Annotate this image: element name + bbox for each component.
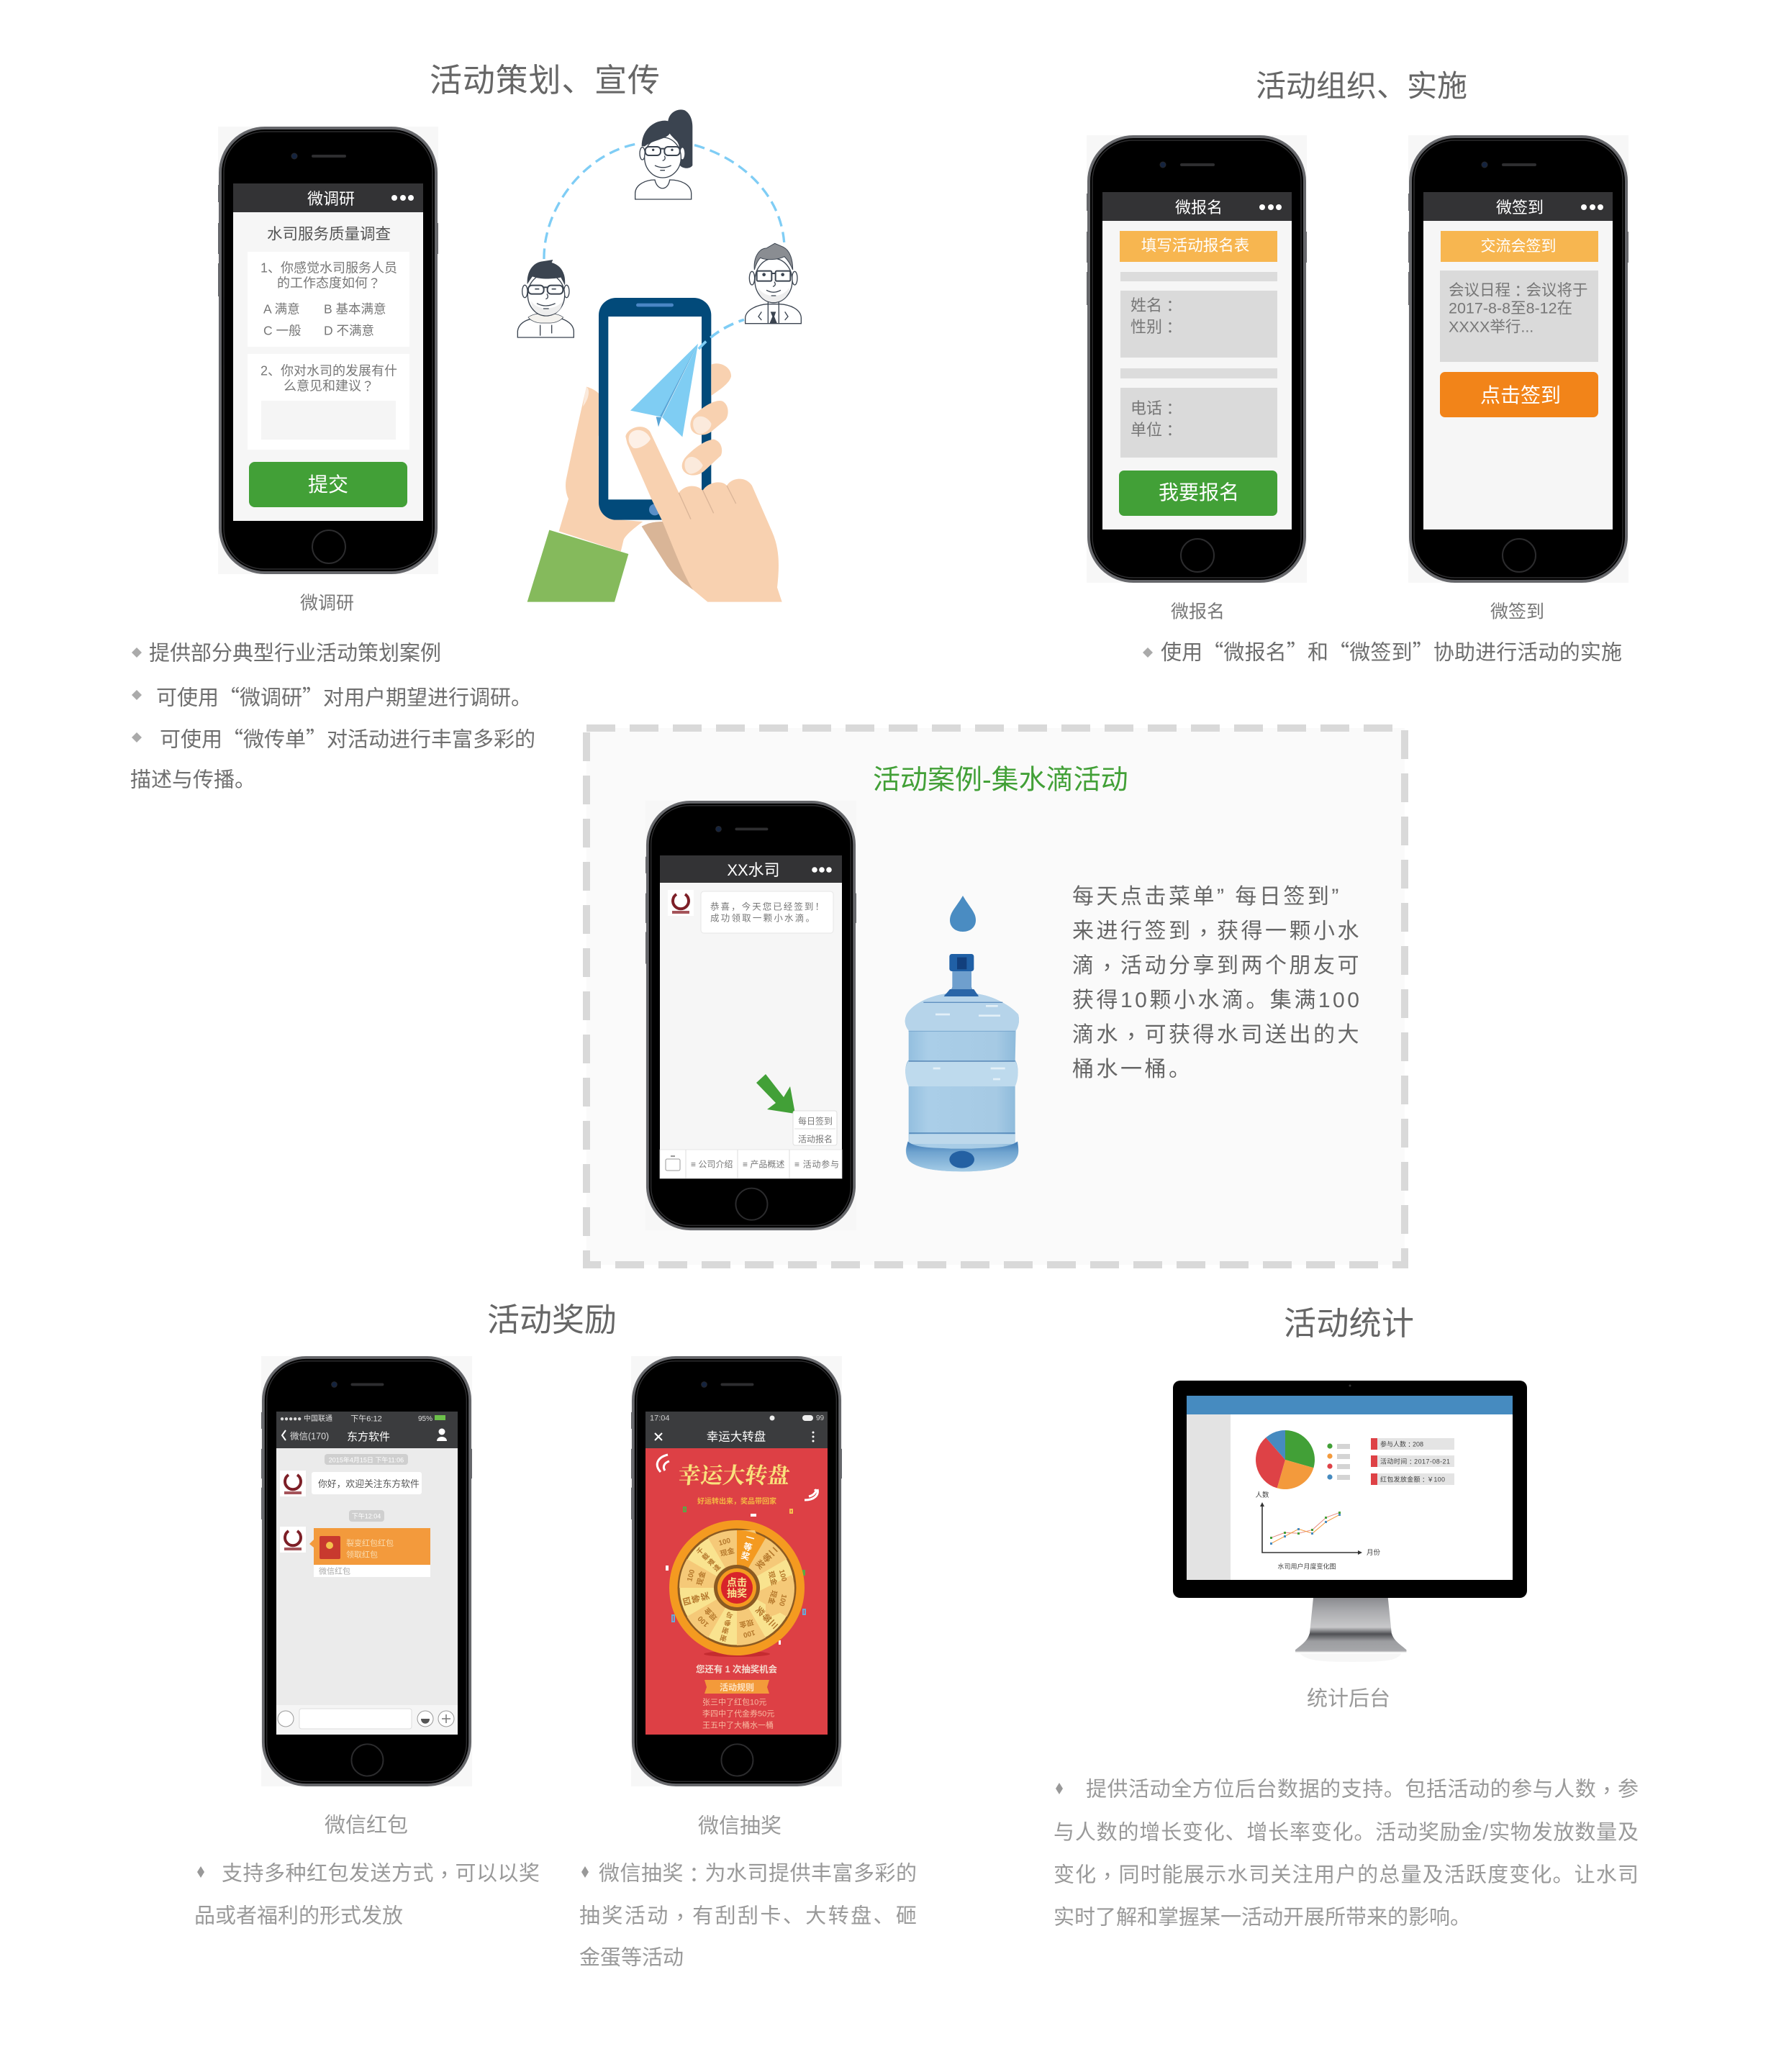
caption: 微信抽奖: 微信抽奖 [698, 1814, 781, 1837]
lottery header: 幸运大转盘 [707, 1430, 766, 1443]
register button [1119, 471, 1277, 516]
prize wheel: 奖 [753, 1558, 767, 1571]
list: statistics [1054, 1774, 1639, 1930]
meeting info box: XXXX举行... [1449, 318, 1533, 335]
prize wheel: 难 [706, 1557, 717, 1568]
list: statistics: 变化，同时能展示水司关注用户的总量及活跃度变化。让水司 [1054, 1860, 1639, 1891]
paper plane [630, 344, 698, 437]
check-in button: 点击签到 [1480, 384, 1561, 406]
stat rows [1371, 1438, 1454, 1485]
stat rows: 参与人数：208 [1380, 1440, 1423, 1449]
meeting info box: 会议日程：会议将于 [1449, 279, 1588, 301]
question card 1: A 满意 [263, 302, 300, 317]
prize wheel: 100 [718, 1537, 732, 1548]
prize wheel: 等 [760, 1611, 774, 1625]
prize wheel: 三 [766, 1617, 780, 1631]
prize wheel: 100 [686, 1568, 697, 1583]
phone header bar: 微报名 [1175, 199, 1223, 217]
form fields: phone and unit: 单位： [1131, 419, 1178, 442]
case heading: 活动案例-集水滴活动 [873, 765, 1128, 796]
welcome bubble [312, 1472, 422, 1494]
lottery header [645, 1412, 828, 1448]
list: statistics: 提供活动全方位后台数据的支持。包括活动的参与人数，参 [1086, 1774, 1639, 1804]
prize wheel: 奖 [753, 1604, 767, 1618]
form fields: phone and unit: 电话： [1131, 397, 1178, 420]
pop-up menu [793, 1111, 837, 1145]
list: statistics: 实时了解和掌握某一活动开展所带来的影响。 [1054, 1905, 1471, 1930]
prize wheel: 现金 [766, 1589, 779, 1606]
monitor stand [1295, 1596, 1406, 1662]
caption: 微签到: 微签到 [1490, 601, 1544, 622]
rules ribbon [704, 1680, 769, 1694]
phone header bar [1423, 192, 1613, 221]
prize wheel: 四 [681, 1596, 693, 1607]
survey title: 水司服务质量调查 [267, 226, 391, 243]
case description: 滴水，可获得水司送出的大 [1072, 1019, 1362, 1050]
list: planning points: 提供部分典型行业活动策划案例 [149, 642, 441, 665]
decorative swirls and confetti [657, 1455, 817, 1644]
icon: water bottle [905, 954, 1019, 1171]
prize wheel: 奖 [699, 1591, 711, 1602]
list: lottery [579, 1859, 917, 1970]
time pill [349, 1510, 384, 1522]
list: planning points: 可使用“微调研”对用户期望进行调研。 [156, 681, 532, 711]
prize wheel: 点击 [727, 1577, 747, 1589]
monitor screen [1187, 1396, 1513, 1580]
phone header bar [660, 855, 842, 883]
pie chart [1256, 1430, 1315, 1489]
dashed trail [699, 319, 744, 349]
case description: 来进行签到，获得一颗小水 [1072, 915, 1362, 947]
chat header [276, 1412, 458, 1448]
question card 1 [248, 252, 409, 347]
question card 1: 的工作态度如何？ [277, 273, 381, 292]
icon: water drop [950, 896, 976, 932]
prize wheel: 载 [700, 1551, 712, 1562]
phone: 微信红包 chat [261, 1356, 472, 1786]
prize wheel: 参 [722, 1617, 732, 1627]
prize wheel: 一 [745, 1532, 756, 1544]
line chart: 水司用户月度变化图 [1277, 1563, 1336, 1570]
green arrow [756, 1074, 795, 1114]
bottom menu: ≡ 产品概述 [743, 1160, 784, 1170]
question card 1: B 基本满意 [324, 302, 386, 317]
phone header bar: XX水司 [727, 861, 780, 879]
phone header bar [1102, 192, 1292, 221]
prize wheel: 奖 [740, 1550, 751, 1562]
caption: 微调研: 微调研 [300, 593, 354, 613]
avatar: man with hoodie [517, 260, 574, 337]
submit button: 提交 [308, 473, 348, 496]
phone header bar [233, 183, 423, 212]
rules ribbon: 活动规则 [720, 1682, 754, 1692]
winners list [702, 1698, 774, 1730]
phone: XX水司 chat [645, 801, 856, 1230]
phone: 微调研 survey [218, 127, 438, 574]
lottery title: 幸运大转盘 [676, 1458, 792, 1489]
illustration: hands holding phone [527, 298, 782, 602]
lottery subtitle: 好运转出来，奖品带回家 [697, 1496, 776, 1506]
question card 1: C 一般 [263, 324, 301, 338]
prize wheel: 100 [742, 1628, 756, 1639]
heading: 活动策划、宣传: 活动策划、宣传 [430, 62, 660, 99]
heading: 活动组织、实施: 活动组织、实施 [1256, 69, 1467, 103]
company logo [668, 890, 694, 916]
phone: 幸运大转盘 lottery [631, 1356, 842, 1786]
prize wheel: 逢 [712, 1562, 722, 1573]
list: planning points: 描述与传播。 [130, 768, 255, 791]
chat header: 东方软件 [347, 1431, 390, 1443]
line chart: 月份 [1367, 1548, 1380, 1557]
register button: 我要报名 [1159, 481, 1239, 504]
prize wheel: 等 [689, 1594, 702, 1604]
phone header bar: 微签到 [1496, 199, 1544, 217]
list: red packet: 品或者福利的形式发放 [194, 1904, 403, 1928]
caption: 微报名: 微报名 [1171, 601, 1225, 622]
list: red packet: 支持多种红包发送方式，可以以奖 [222, 1859, 540, 1889]
fingers holding phone [682, 363, 731, 476]
pie legend [1327, 1443, 1350, 1480]
monitor body [1173, 1381, 1527, 1598]
avatar: woman [635, 109, 692, 199]
line chart: 人数 [1255, 1491, 1269, 1499]
pointing hand [625, 427, 782, 602]
time pill: 2015年4月15日 下午11:06 [329, 1456, 404, 1463]
form title bar: 填写活动报名表 [1141, 237, 1249, 255]
red packet card: 微信红包 [319, 1566, 350, 1576]
phone screen background [233, 183, 423, 521]
prize wheel: 千 [694, 1545, 706, 1557]
welcome bubble: 你好，欢迎关注东方软件 [318, 1478, 420, 1489]
prize wheel: 现金 [719, 1545, 735, 1558]
winners list: 李四中了代金券50元 [702, 1708, 774, 1718]
lottery header: 99 [816, 1414, 825, 1422]
case description [1072, 885, 1362, 1081]
form fields: phone and unit [1120, 388, 1277, 458]
red packet card: 裂变红包红包 [346, 1538, 394, 1548]
case description: 每天点击菜单” 每日签到” [1072, 885, 1341, 909]
caption: 统计后台: 统计后台 [1307, 1686, 1390, 1711]
lottery header: 17:04 [650, 1414, 670, 1423]
company logo [280, 1527, 306, 1553]
winners list: 王五中了大桶水一桶 [702, 1719, 774, 1730]
prize wheel: 谢 [719, 1632, 728, 1643]
panel: activity case [586, 728, 1405, 1265]
bottom menu [660, 1150, 842, 1178]
chat header: 下午6:12 [350, 1414, 382, 1423]
red packet card [309, 1528, 430, 1577]
prize wheel: 100 [777, 1569, 788, 1583]
winners list: 张三中了红包10元 [702, 1698, 766, 1707]
list: planning points: 可使用“微传单”对活动进行丰富多彩的 [160, 722, 535, 753]
green sleeve [527, 530, 628, 602]
phone: 微报名 form [1087, 135, 1307, 583]
heading: 活动统计: 活动统计 [1284, 1305, 1414, 1342]
prize wheel: 谢 [721, 1625, 730, 1635]
question card 2: 2、你对水司的发展有什 [260, 364, 397, 378]
question card 2 [248, 354, 409, 450]
chat bubble: 成功领取一颗小水滴。 [710, 912, 815, 924]
list: red packet [194, 1859, 540, 1928]
heading: 活动奖励: 活动奖励 [487, 1301, 617, 1338]
form fields: name and gender [1120, 291, 1277, 358]
prize wheel: 二 [766, 1545, 780, 1558]
phone: 微签到 check-in [1408, 135, 1628, 583]
chat header: ●●●●● 中国联通 [280, 1414, 332, 1423]
check-in button [1440, 372, 1598, 417]
company logo [280, 1471, 306, 1496]
chat bubble: 恭喜，今天您已经签到！ [710, 901, 824, 912]
time pill: 下午12:04 [352, 1512, 381, 1519]
case description: 获得10颗小水滴。集满100 [1072, 989, 1362, 1012]
prize wheel: 现金 [738, 1617, 755, 1630]
stat rows: 红包发放金额：￥100 [1380, 1475, 1445, 1484]
prize wheel: 现金 [702, 1606, 719, 1622]
input bar [276, 1705, 458, 1735]
meeting info box: 2017-8-8至8-12在 [1449, 299, 1572, 317]
list: organisation point: 使用“微报名”和“微签到”协助进行活动的实施 [1161, 636, 1622, 666]
chat bubble [701, 891, 833, 933]
prize wheel: 等 [743, 1540, 753, 1553]
form fields: name and gender: 性别： [1131, 315, 1178, 338]
question card 1: D 不满意 [324, 324, 374, 338]
prize wheel: 抽奖 [727, 1587, 747, 1599]
case description: 桶水一桶。 [1072, 1058, 1193, 1081]
avatar: man with tie [746, 243, 801, 324]
meeting info box [1440, 271, 1598, 362]
red packet card: 领取红包 [346, 1550, 378, 1560]
bottom menu: ≡ 公司介绍 [691, 1160, 733, 1170]
bottom menu: ≡ 活动参与 [794, 1158, 839, 1170]
list: lottery: 微信抽奖：为水司提供丰富多彩的 [599, 1859, 917, 1889]
check-in title bar [1441, 231, 1598, 262]
smartphone [599, 298, 711, 520]
prize wheel [669, 1520, 805, 1657]
dashed connection arcs [544, 143, 784, 259]
back hand [559, 387, 643, 552]
list: lottery: 抽奖活动，有刮刮卡、大转盘、砸 [579, 1901, 917, 1931]
list: lottery: 金蛋等活动 [579, 1945, 684, 1970]
icon: desktop monitor dashboard [1173, 1381, 1527, 1662]
chat header: 95% [418, 1415, 432, 1423]
list: planning points [130, 642, 535, 791]
prize wheel: 100 [697, 1614, 710, 1628]
caption: 微信红包: 微信红包 [325, 1813, 408, 1837]
pop-up menu: 每日签到 [798, 1115, 833, 1127]
time pill [325, 1454, 408, 1465]
prize wheel: 等 [760, 1551, 774, 1565]
question card 2: 么意见和建议？ [284, 377, 374, 396]
prize wheel: 现金 [766, 1570, 779, 1586]
stat rows: 活动时间：2017-08-21 [1380, 1457, 1450, 1466]
pop-up menu: 活动报名 [798, 1134, 833, 1144]
phone header bar: 微调研 [307, 190, 355, 208]
prize wheel: 100 [777, 1593, 788, 1607]
submit button [249, 462, 407, 507]
chat header: 微信(170) [290, 1432, 329, 1442]
form title bar [1120, 231, 1277, 262]
line chart [1255, 1491, 1380, 1570]
prize wheel: 现金 [694, 1570, 707, 1586]
prize wheel: 与 [725, 1610, 734, 1620]
case description: 滴，活动分享到两个朋友可 [1072, 950, 1362, 981]
chances text: 您还有 1 次抽奖机会 [696, 1663, 777, 1675]
form fields: name and gender: 姓名： [1131, 294, 1178, 317]
question card 1: 1、你感觉水司服务人员 [260, 260, 397, 275]
list: statistics: 与人数的增长变化、增长率变化。活动奖励金/实物发放数量及 [1054, 1820, 1639, 1845]
check-in title bar: 交流会签到 [1481, 238, 1556, 255]
